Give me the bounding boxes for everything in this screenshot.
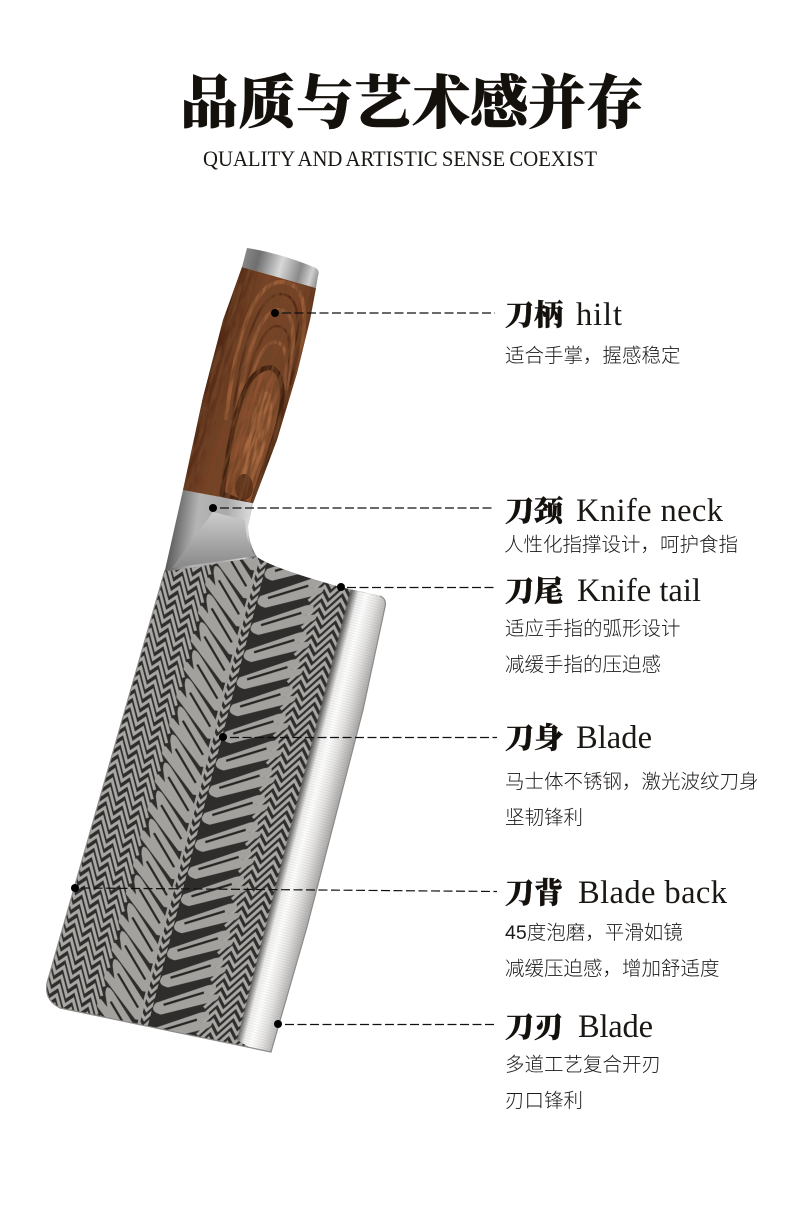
heading: knife neck bbox=[505, 493, 724, 529]
heading: blade: Blade bbox=[576, 720, 652, 756]
leader line: blade bbox=[219, 733, 497, 741]
description: blade bbox=[505, 771, 759, 829]
heading: cutting edge bbox=[505, 1009, 653, 1045]
heading: cutting edge: 刀刃 bbox=[505, 1012, 563, 1044]
description: blade back bbox=[505, 922, 720, 980]
description: blade back: 减缓压迫感，增加舒适度 bbox=[505, 958, 720, 980]
heading: blade back bbox=[505, 875, 728, 911]
heading: hilt: hilt bbox=[576, 297, 622, 333]
knife neck bolster bbox=[165, 490, 257, 571]
heading: hilt: 刀柄 bbox=[505, 299, 563, 332]
knife illustration bbox=[0, 241, 420, 1100]
description: knife tail: 适应手指的弧形设计 bbox=[505, 618, 681, 640]
callout: blade bbox=[219, 720, 759, 829]
heading: knife neck: Knife neck bbox=[576, 493, 724, 529]
leader line: knife tail bbox=[337, 583, 497, 591]
knife hilt wood bbox=[183, 267, 316, 503]
callout: cutting edge bbox=[274, 1009, 661, 1112]
description: knife tail: 减缓手指的压迫感 bbox=[505, 654, 661, 676]
subtitle: QUALITY AND ARTISTIC SENSE COEXIST bbox=[203, 146, 598, 171]
heading: blade bbox=[505, 720, 652, 756]
heading: knife tail: 刀尾 bbox=[505, 575, 563, 608]
heading: knife tail bbox=[505, 573, 701, 609]
description: blade back: 45度泡磨，平滑如镜 bbox=[505, 922, 683, 944]
description: cutting edge bbox=[505, 1054, 661, 1112]
heading: blade back: 刀背 bbox=[505, 876, 563, 910]
leader line: knife neck bbox=[209, 504, 492, 512]
leader line: cutting edge bbox=[274, 1020, 495, 1028]
description: blade: 马士体不锈钢，激光波纹刀身 bbox=[505, 771, 759, 793]
knife blade bbox=[46, 557, 386, 1053]
title: 品质与艺术感并存 bbox=[180, 71, 644, 136]
heading: knife tail: Knife tail bbox=[577, 573, 701, 609]
description: knife neck: 人性化指撑设计，呵护食指 bbox=[504, 534, 738, 556]
heading: knife neck: 刀颈 bbox=[505, 495, 566, 528]
description: blade: 坚韧锋利 bbox=[505, 807, 583, 829]
description: hilt: 适合手掌，握感稳定 bbox=[505, 345, 681, 367]
description: knife tail bbox=[505, 618, 681, 676]
callout: knife neck bbox=[209, 493, 738, 556]
callout: blade back bbox=[71, 875, 728, 980]
callout: hilt bbox=[271, 297, 681, 367]
heading: blade: 刀身 bbox=[505, 722, 563, 755]
leader line: blade back bbox=[71, 884, 497, 892]
callout: knife tail bbox=[337, 573, 701, 676]
description: cutting edge: 多道工艺复合开刃 bbox=[505, 1054, 661, 1076]
description: cutting edge: 刃口锋利 bbox=[505, 1090, 583, 1112]
heading: cutting edge: Blade bbox=[578, 1009, 653, 1045]
knife butt cap bbox=[242, 248, 319, 288]
heading: blade back: Blade back bbox=[578, 875, 728, 911]
leader line: hilt bbox=[271, 309, 495, 317]
heading: hilt bbox=[505, 297, 622, 333]
